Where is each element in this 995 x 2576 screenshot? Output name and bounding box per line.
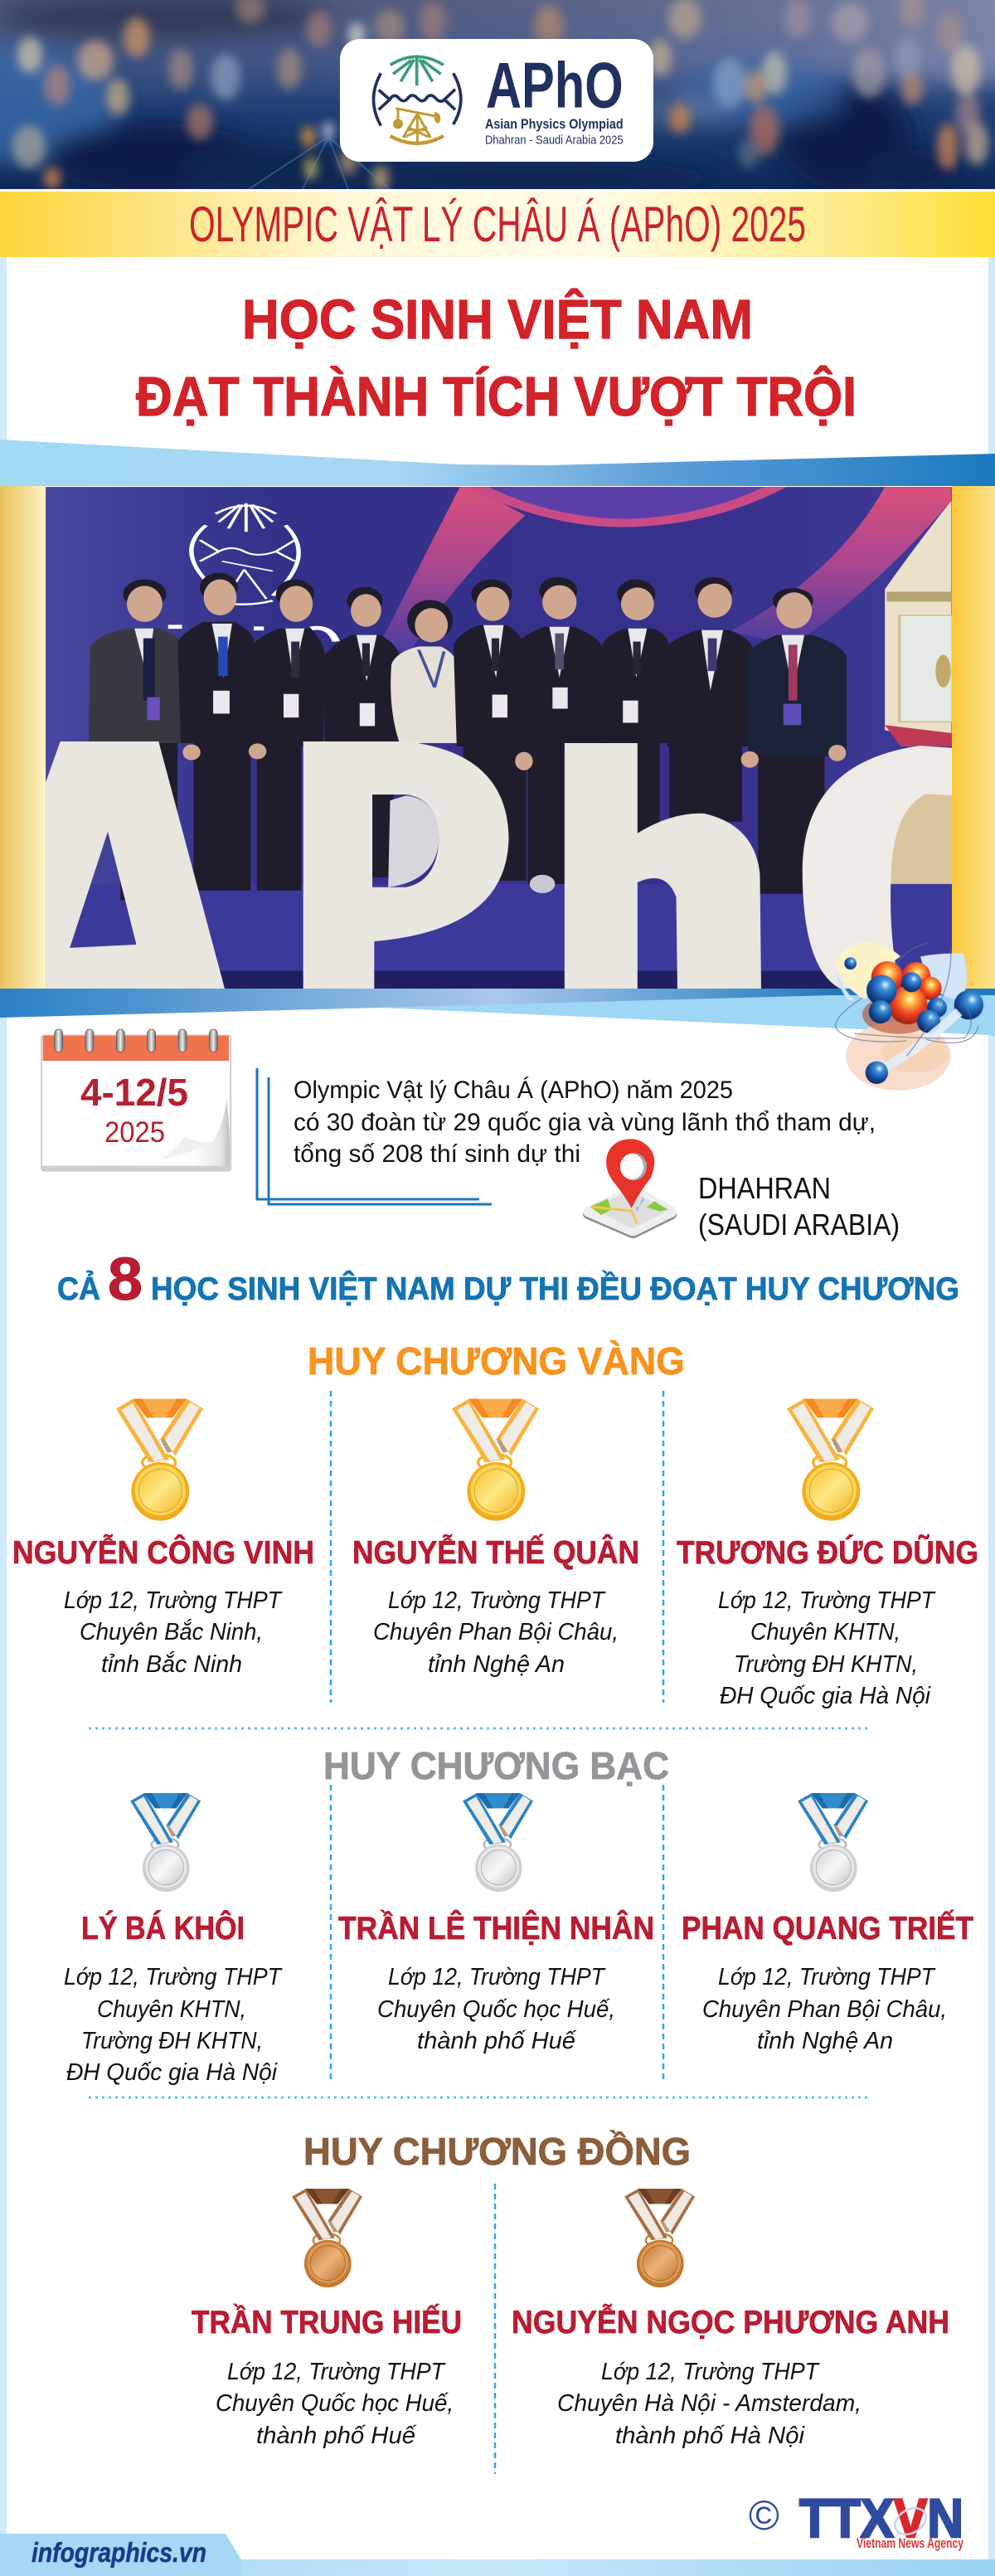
agency wordmark: TTXVN bbox=[799, 2487, 963, 2549]
heading: all eight students won medals: 8 bbox=[108, 1247, 143, 1313]
name: TRẦN TRUNG HIẾU bbox=[192, 2304, 462, 2340]
name: LÝ BÁ KHÔI bbox=[81, 1909, 245, 1947]
person 8 bbox=[603, 579, 669, 844]
name: NGUYỄN THẾ QUÂN bbox=[352, 1534, 639, 1571]
school bbox=[216, 2359, 454, 2449]
banner: yellow band bbox=[0, 192, 995, 257]
logo wordmark: APhO bbox=[486, 48, 624, 121]
school: Chuyên Quốc học Huế, bbox=[377, 1996, 615, 2023]
school: tỉnh Nghệ An bbox=[757, 2028, 893, 2054]
school bbox=[702, 1964, 947, 2054]
bracket lines bbox=[257, 1068, 492, 1204]
icon: silver medal bbox=[130, 1793, 201, 1892]
logo location: Dhahran - Saudi Arabia 2025 bbox=[485, 134, 624, 147]
school: Lớp 12, Trường THPT bbox=[601, 2359, 820, 2385]
school: tỉnh Bắc Ninh bbox=[101, 1650, 242, 1678]
location label: (SAUDI ARABIA) bbox=[698, 1208, 900, 1242]
school: Lớp 12, Trường THPT bbox=[718, 1587, 936, 1614]
people bbox=[89, 573, 847, 901]
globe swoosh bbox=[891, 2503, 930, 2540]
name: NGUYỄN CÔNG VINH bbox=[12, 1533, 314, 1571]
person 7 bbox=[521, 577, 603, 893]
icon: silver medal bbox=[463, 1793, 533, 1892]
person 9 bbox=[666, 577, 754, 822]
heading: all eight students won medals: CẢ bbox=[57, 1271, 100, 1307]
school bbox=[373, 1587, 619, 1678]
logo: APhO bbox=[340, 39, 653, 162]
person 6 bbox=[454, 579, 527, 881]
school bbox=[557, 2359, 862, 2449]
panel: gold student 1 bbox=[12, 1399, 314, 1678]
icon: silver medal bbox=[798, 1793, 868, 1892]
location label bbox=[698, 1171, 900, 1242]
name: TRẦN LÊ THIỆN NHÂN bbox=[338, 1910, 654, 1947]
icon: APhO emblem bbox=[373, 56, 461, 143]
panel: silver student 2 bbox=[338, 1793, 654, 2054]
icon: gold medal bbox=[787, 1399, 874, 1521]
person 3 bbox=[247, 579, 325, 891]
school: tỉnh Nghệ An bbox=[428, 1651, 565, 1678]
school: Lớp 12, Trường THPT bbox=[388, 1964, 606, 1990]
school bbox=[64, 1587, 283, 1678]
panel: bronze student 1 bbox=[192, 2189, 462, 2449]
school: Lớp 12, Trường THPT bbox=[718, 1964, 936, 1990]
school bbox=[718, 1587, 936, 1709]
panel: bronze student 2 bbox=[512, 2189, 949, 2449]
school: ĐH Quốc gia Hà Nội bbox=[66, 2059, 279, 2086]
school: Lớp 12, Trường THPT bbox=[388, 1587, 606, 1614]
footer band bbox=[0, 2534, 995, 2576]
person 1 bbox=[89, 579, 181, 901]
photo backdrop bbox=[46, 487, 952, 884]
photo backdrop emblem bbox=[168, 503, 336, 642]
panel: gold student 2 bbox=[352, 1399, 639, 1678]
school: Trường ĐH KHTN, bbox=[81, 2028, 263, 2054]
photo letter P bbox=[303, 741, 509, 990]
blue wave below photo bbox=[0, 989, 995, 1037]
title: main headline: ĐẠT THÀNH TÍCH VƯỢT TRỘI bbox=[136, 366, 857, 428]
school: Lớp 12, Trường THPT bbox=[227, 2359, 446, 2385]
icon: bronze medal bbox=[624, 2189, 695, 2287]
location label: DHAHRAN bbox=[698, 1171, 831, 1205]
hands bbox=[182, 743, 847, 770]
icon: gold medal bbox=[452, 1399, 539, 1521]
icon: map pin bbox=[583, 1139, 677, 1238]
school: thành phố Huế bbox=[417, 2028, 577, 2054]
text block: event summary: Olympic Vật lý Châu Á (APhO) năm 2025 bbox=[294, 1077, 733, 1104]
panel: silver student 1 bbox=[64, 1793, 283, 2086]
photo letter h bbox=[565, 743, 761, 990]
calendar date: 4-12/5 bbox=[80, 1071, 188, 1114]
heading: gold medal: HUY CHƯƠNG VÀNG bbox=[308, 1339, 685, 1383]
name: NGUYỄN NGỌC PHƯƠNG ANH bbox=[512, 2304, 949, 2340]
school: Chuyên Phan Bội Châu, bbox=[702, 1996, 947, 2023]
school bbox=[64, 1964, 283, 2086]
photo swooshes bbox=[379, 487, 952, 653]
person 5 woman in white bbox=[391, 600, 458, 743]
icon: bronze medal bbox=[292, 2189, 362, 2287]
school: Chuyên Bắc Ninh, bbox=[80, 1618, 263, 1645]
photo letter A bbox=[46, 741, 226, 990]
icon: atom bbox=[836, 941, 983, 1091]
school: Chuyên KHTN, bbox=[750, 1619, 900, 1645]
blue wave above photo bbox=[0, 440, 995, 486]
icon: gold medal bbox=[116, 1399, 203, 1521]
school: thành phố Huế bbox=[256, 2423, 417, 2449]
school: Lớp 12, Trường THPT bbox=[64, 1587, 283, 1614]
person 2 bbox=[177, 573, 254, 891]
photo room at right bbox=[885, 501, 952, 884]
photo letter O bbox=[803, 746, 954, 990]
school: ĐH Quốc gia Hà Nội bbox=[720, 1683, 932, 1709]
person 4 bbox=[323, 587, 400, 877]
title: main headline: HỌC SINH VIỆT NAM bbox=[242, 289, 753, 351]
school bbox=[377, 1964, 615, 2054]
logo tagline: Asian Physics Olympiad bbox=[485, 116, 624, 132]
dividers: silver columns bbox=[331, 1785, 663, 2079]
text block: event summary bbox=[294, 1077, 876, 1168]
icon: calendar bbox=[41, 1029, 231, 1171]
school: Chuyên Phan Bội Châu, bbox=[373, 1619, 619, 1645]
school: thành phố Hà Nội bbox=[615, 2423, 806, 2449]
heading: bronze medal: HUY CHƯƠNG ĐỒNG bbox=[303, 2130, 691, 2173]
heading: all eight students won medals: HỌC SINH VIỆT NAM DỰ THI ĐỀU ĐOẠT HUY CHƯƠNG bbox=[151, 1271, 959, 1307]
photo: team with APhO letters bbox=[46, 487, 954, 990]
person 10 bbox=[747, 588, 847, 894]
school: Trường ĐH KHTN, bbox=[734, 1651, 918, 1678]
school: Lớp 12, Trường THPT bbox=[64, 1964, 283, 1990]
school: Chuyên Quốc học Huế, bbox=[216, 2390, 454, 2417]
heading: silver medal: HUY CHƯƠNG BẠC bbox=[323, 1744, 669, 1787]
text block: event summary: có 30 đoàn từ 29 quốc gia và vùng lãnh thổ tham dự, bbox=[294, 1109, 876, 1136]
school: Chuyên Hà Nội - Amsterdam, bbox=[557, 2390, 862, 2417]
title: main headline bbox=[136, 289, 857, 428]
photo carpet bbox=[46, 884, 953, 990]
dividers: gold columns bbox=[331, 1391, 663, 1703]
photo letter P counter detail bbox=[388, 795, 439, 887]
school: Chuyên KHTN, bbox=[97, 1996, 246, 2023]
heading: all eight students won medals bbox=[57, 1247, 959, 1313]
header background: bokeh network bbox=[0, 0, 995, 197]
gold side strips bbox=[0, 486, 995, 989]
copyright mark: © bbox=[749, 2492, 779, 2539]
calendar year: 2025 bbox=[104, 1116, 165, 1149]
panel: gold student 3 bbox=[677, 1399, 978, 1709]
logo: TTXVN bbox=[749, 2487, 963, 2551]
panel: silver student 3 bbox=[682, 1793, 973, 2054]
text block: event summary: tổng số 208 thí sinh dự thi bbox=[294, 1140, 580, 1168]
footer site name: infographics.vn bbox=[32, 2537, 206, 2568]
